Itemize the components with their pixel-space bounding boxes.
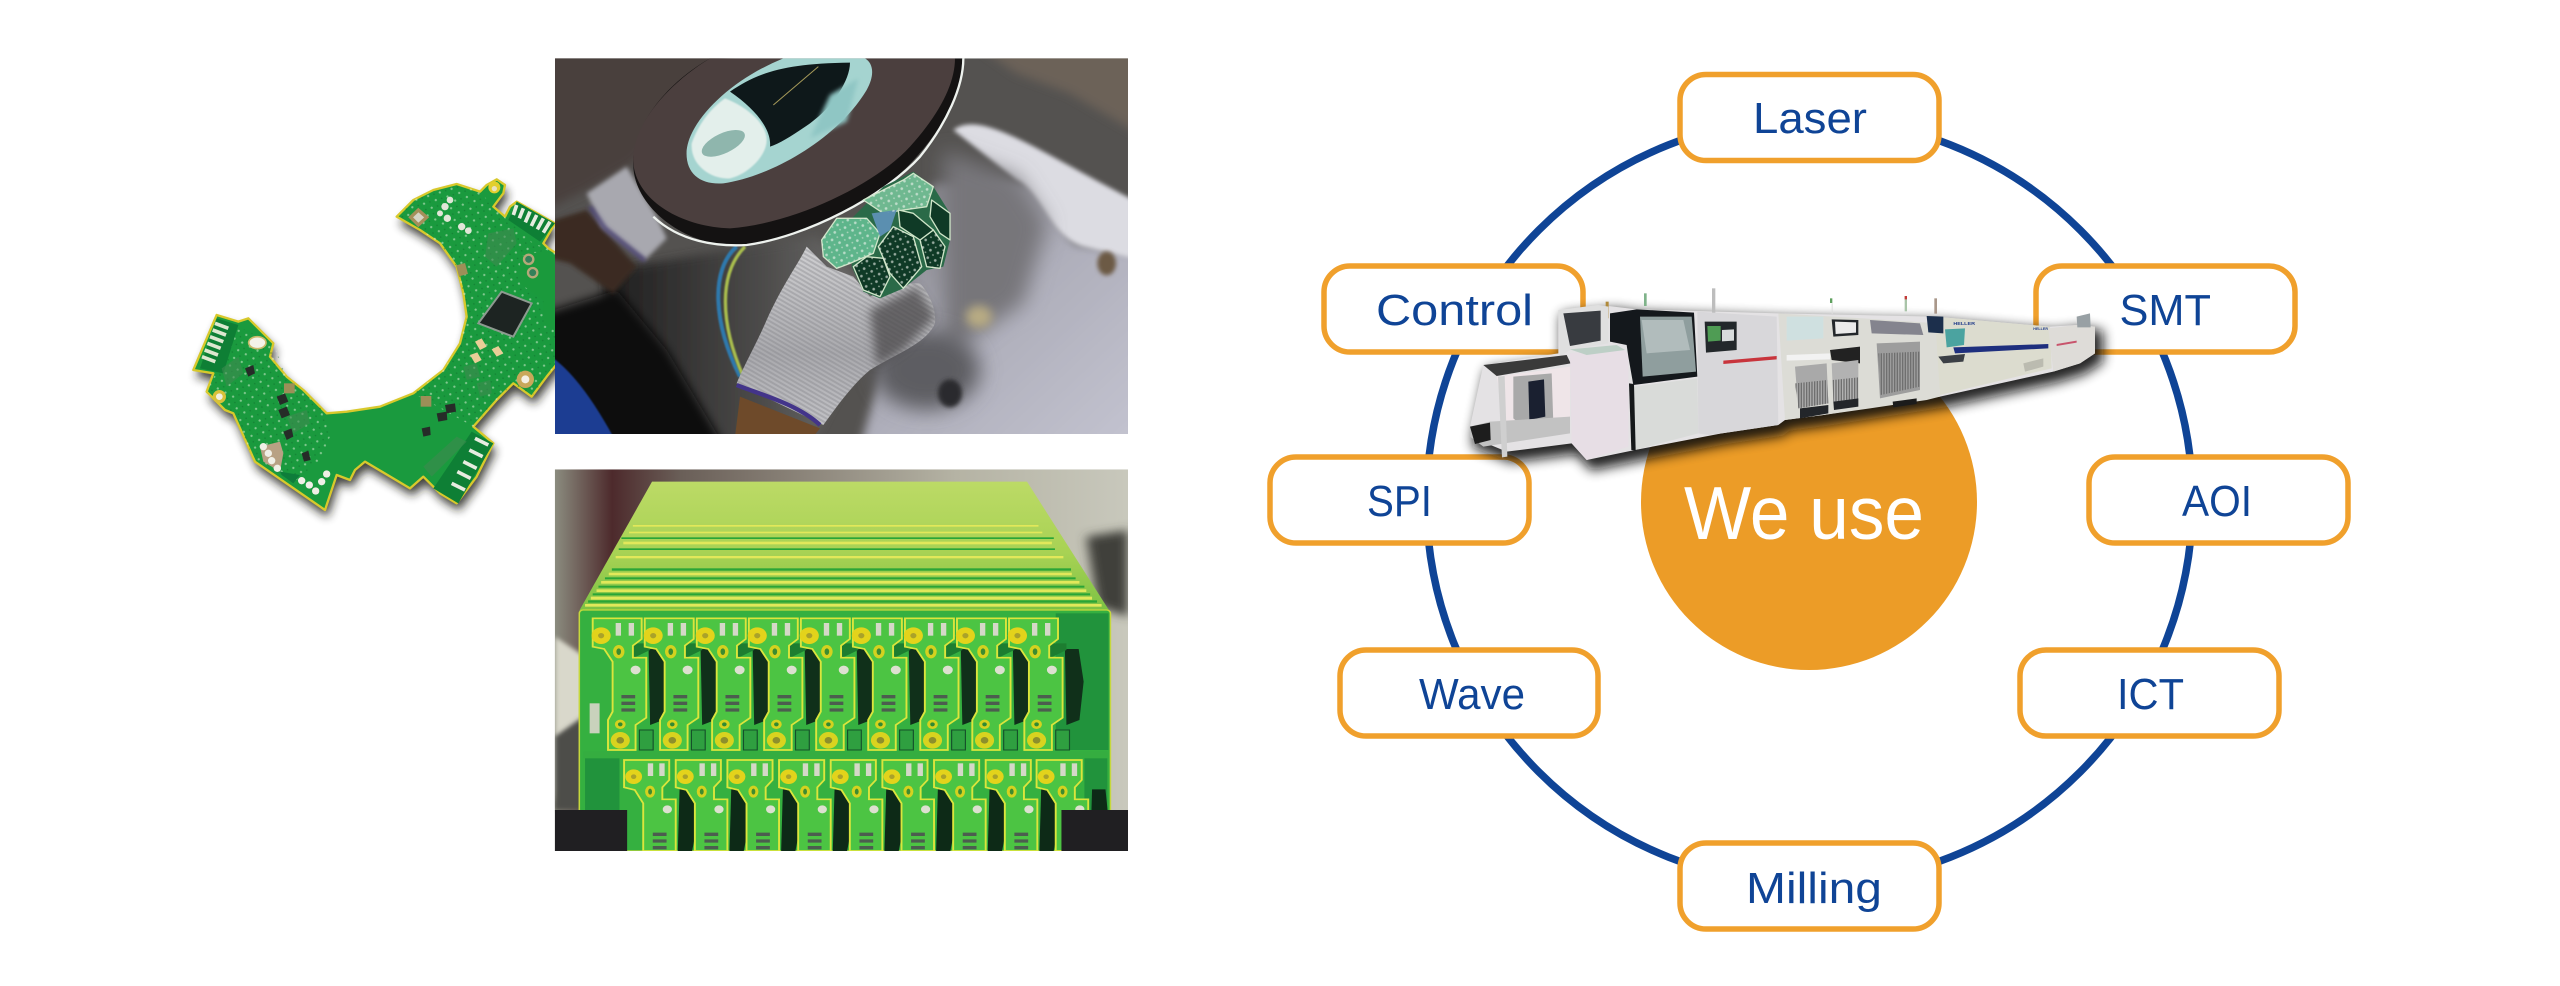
pick-and-place mounters (1778, 313, 1940, 420)
photo: inspecting circuit boards under a magnifier lamp (517, 33, 1167, 483)
gloved hand (735, 247, 935, 437)
label: SPI (1270, 457, 1529, 543)
label: Control (1324, 266, 1583, 352)
label: Control: Control (1376, 286, 1533, 335)
stencil printer (1610, 309, 1698, 451)
label: Laser: Laser (1753, 94, 1867, 143)
label: ICT: ICT (2117, 670, 2184, 719)
label: Laser (1680, 74, 1939, 160)
label: SMT (2036, 266, 2295, 352)
reflow oven (1927, 316, 2052, 395)
centre disc: We use (1641, 334, 1977, 670)
label: SPI: SPI (1367, 477, 1432, 526)
stack of boards seen from above (579, 482, 1109, 611)
label: Milling (1680, 843, 1939, 929)
centre disc: We use: We use (1684, 471, 1924, 555)
label: ICT (2020, 650, 2279, 736)
photo: stack of green panelised circuit boards (555, 469, 1128, 857)
reflow oven: HELLER (2033, 327, 2049, 331)
front panel rows (579, 610, 1110, 857)
signal poles (1606, 288, 1937, 318)
cooling module (2048, 313, 2095, 372)
hexagonal circuit boards (822, 172, 950, 298)
SMT production line machine photo (1470, 288, 2103, 471)
inspection unit (1697, 312, 1778, 435)
lamp ring (633, 58, 963, 246)
label: Wave: Wave (1419, 670, 1525, 719)
label: Milling: Milling (1746, 864, 1882, 913)
label: AOI: AOI (2182, 477, 2252, 526)
green circuit board with drop shadow (193, 179, 608, 517)
magnifier lens (687, 58, 872, 183)
process ring (1426, 118, 2192, 884)
label: Wave (1340, 650, 1598, 736)
label: AOI (2089, 457, 2348, 543)
tower and magazine loader (1470, 305, 1628, 460)
label: SMT: SMT (2120, 286, 2211, 335)
reflow oven: HELLER (1953, 321, 1975, 327)
